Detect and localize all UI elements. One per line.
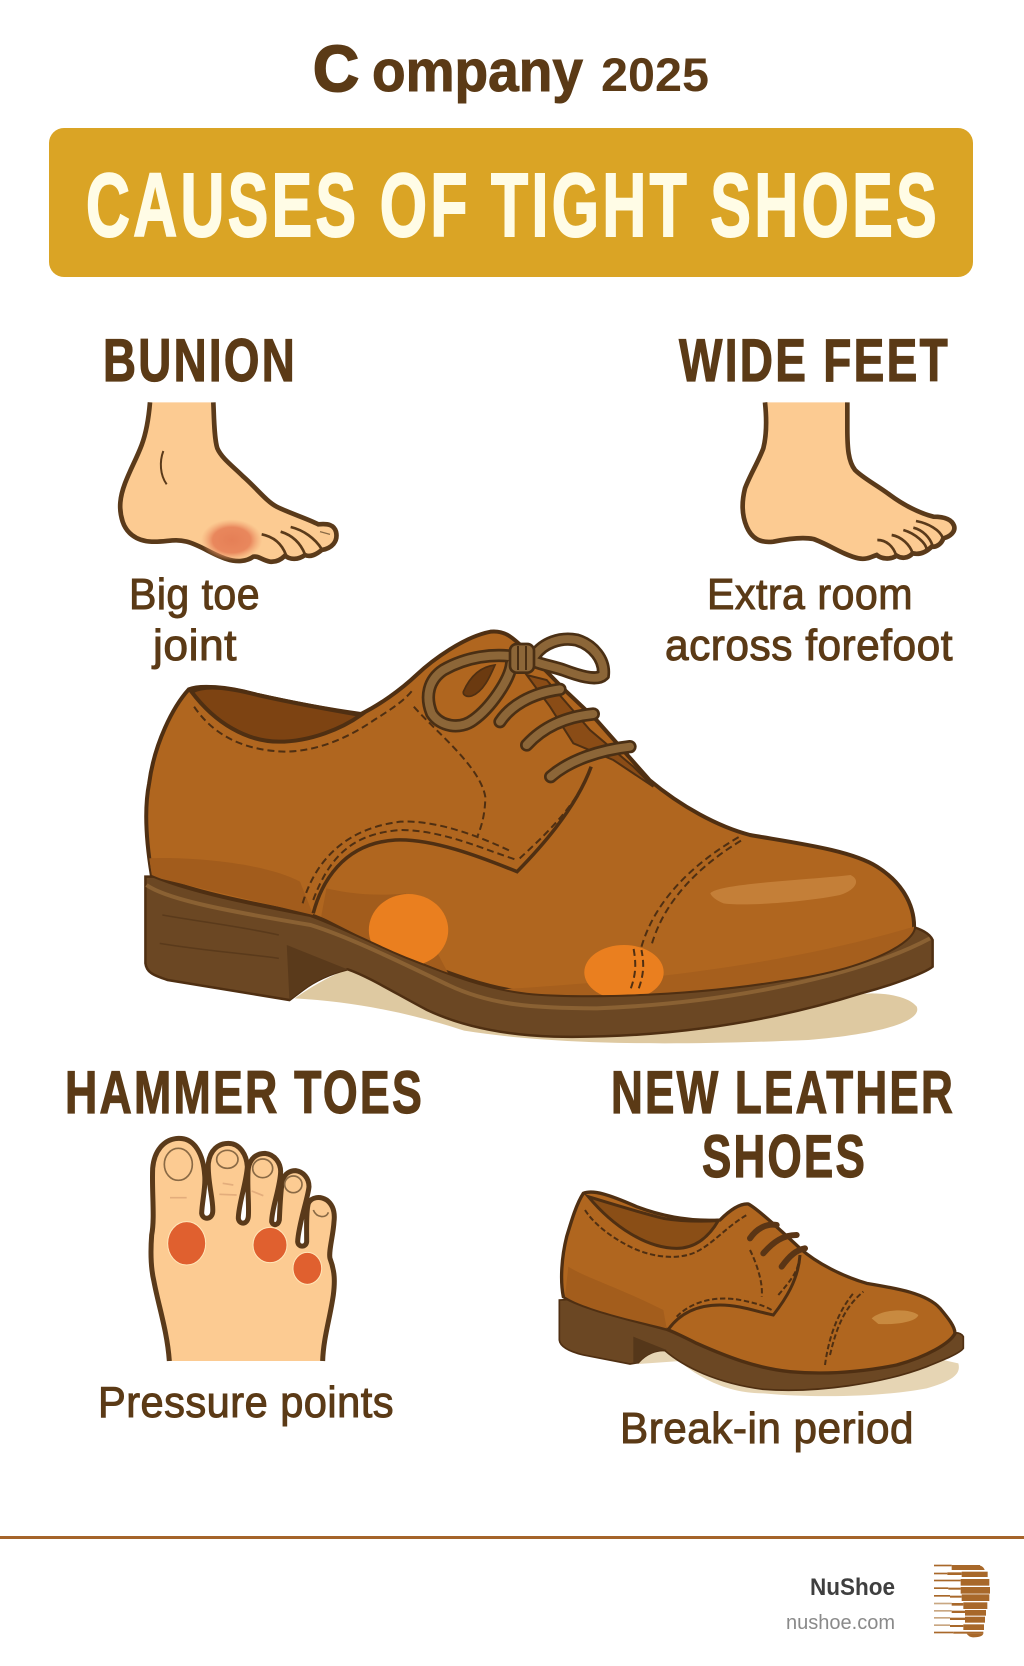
company header: 2025 — [601, 48, 709, 101]
laces outline — [428, 639, 630, 777]
brand url: nushoe.com — [786, 1612, 895, 1634]
title banner — [49, 128, 973, 277]
shoe collar opening — [191, 688, 361, 742]
pressure spot: side — [369, 894, 448, 966]
shoe shadow — [295, 969, 917, 1043]
pressure spot: toe — [584, 945, 664, 1000]
heel details — [287, 945, 348, 1000]
shoe upper — [146, 631, 914, 995]
caption: pressure points: Pressure points — [98, 1378, 394, 1427]
footer rule — [0, 1536, 1024, 1539]
heading: new leather shoes — [611, 1059, 955, 1190]
facing seam — [313, 767, 591, 913]
icon: hammer toes foot — [151, 1138, 334, 1361]
laces fill — [428, 639, 630, 777]
company header: C — [313, 32, 359, 105]
caption: big toe joint: Big toe — [129, 570, 260, 619]
lace channel — [527, 675, 653, 787]
heading: wide feet: WIDE FEET — [679, 327, 950, 394]
icon: bunion foot — [120, 402, 336, 562]
company header — [313, 32, 709, 105]
stitching — [194, 688, 742, 988]
caption: big toe joint — [129, 570, 260, 670]
caption: extra room across forefoot — [665, 570, 953, 670]
shaded leather areas — [149, 858, 914, 1003]
caption: extra room across forefoot: Extra room — [707, 570, 913, 619]
eyelet hole — [463, 665, 495, 696]
caption: big toe joint: joint — [151, 621, 237, 670]
shoe sole and heel — [145, 877, 933, 1037]
caption: break-in period: Break-in period — [620, 1404, 914, 1453]
caption: extra room across forefoot: across forefoot — [665, 621, 953, 670]
lace knot — [510, 644, 534, 673]
illustration: small brown shoe — [559, 1192, 963, 1396]
heading: new leather shoes: SHOES — [702, 1123, 867, 1190]
brand name: NuShoe — [810, 1574, 895, 1601]
illustration: large brown shoe — [145, 631, 933, 1043]
icon: NuShoe logo — [934, 1565, 990, 1637]
cap highlight — [710, 875, 856, 904]
heading: bunion: BUNION — [103, 327, 297, 394]
heading: hammer toes: HAMMER TOES — [65, 1059, 424, 1126]
icon: wide foot — [743, 402, 954, 559]
shoe welt — [146, 885, 930, 1008]
company header: ompany — [372, 39, 583, 104]
